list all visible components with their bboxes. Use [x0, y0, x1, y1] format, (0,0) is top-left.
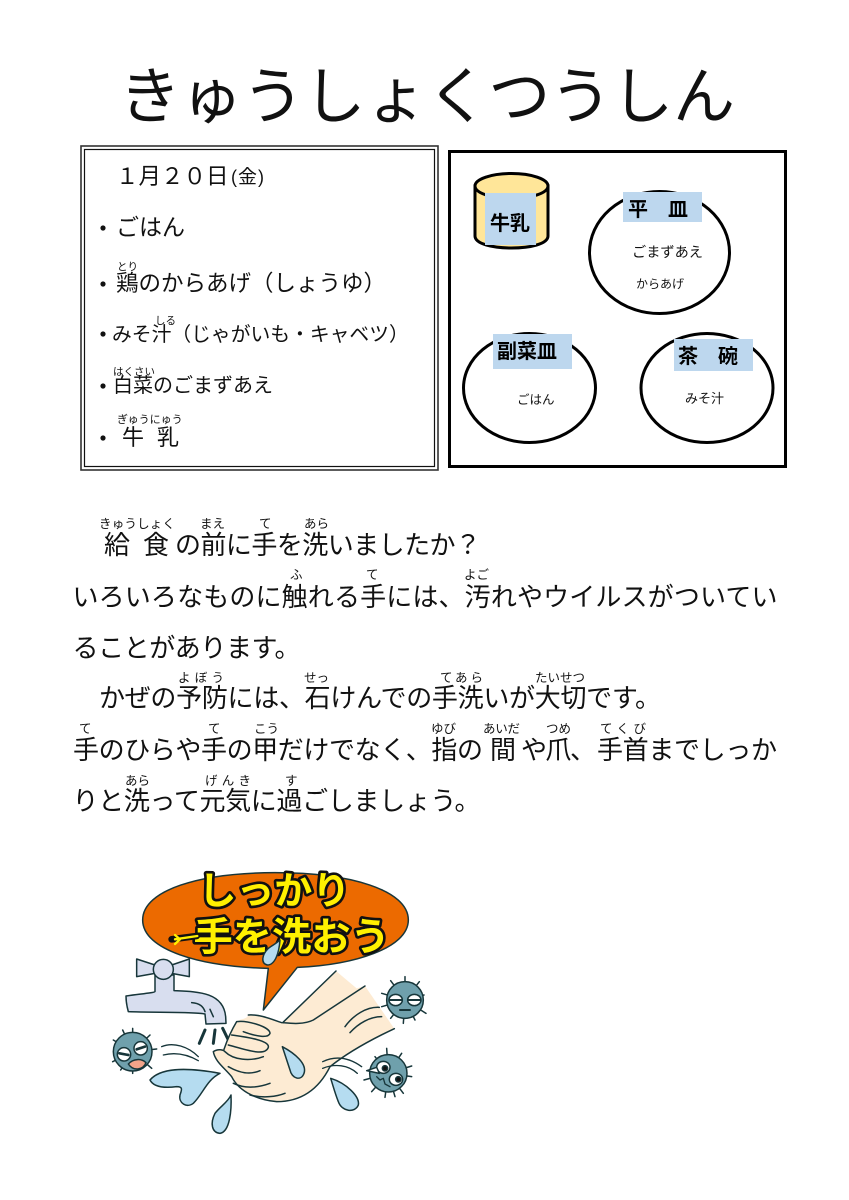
water drops	[150, 1069, 358, 1133]
line 3: ることがあります。	[72, 633, 300, 663]
panel: menu list	[81, 146, 438, 470]
line 5: ゆび	[431, 722, 457, 736]
line 1: の前に手を洗いましたか？	[175, 530, 481, 560]
line 6: す	[285, 774, 298, 788]
menu date: １月２０日	[116, 164, 229, 189]
flat plate: ごまずあえ	[632, 245, 703, 261]
drop on bubble	[263, 940, 280, 965]
menu item: napa salad: はくさい	[113, 366, 155, 378]
line 5: てくび	[600, 722, 646, 736]
menu item: napa salad: 白菜のごまずあえ	[113, 374, 273, 397]
line 1: きゅうしょく	[99, 517, 175, 531]
line 5: 手首までしっか	[597, 735, 777, 765]
line 2: て	[366, 568, 379, 582]
milk carton	[475, 174, 548, 248]
side dish plate: 副菜皿	[497, 340, 557, 363]
line 6: げんき	[205, 774, 251, 788]
line 1: て	[259, 517, 272, 531]
line 2: いろいろなものに触れる手には、汚れやウイルスがついてい	[72, 582, 778, 612]
soup bowl	[641, 334, 773, 442]
line 5	[73, 722, 777, 765]
line 1: 食	[143, 530, 169, 560]
line 1	[99, 517, 481, 560]
bubble slogan: しっかり	[198, 871, 350, 913]
line 2	[72, 567, 778, 612]
menu item: napa salad	[100, 366, 273, 397]
line 1: まえ	[200, 517, 225, 531]
menu date: 金	[238, 166, 257, 188]
menu item: milk: 牛	[122, 425, 144, 450]
title: きゅうしょくつうしん	[119, 63, 735, 132]
line 5: て	[208, 722, 221, 736]
line 6: あら	[125, 774, 150, 788]
menu date: )	[258, 167, 264, 187]
speech bubble	[143, 873, 408, 1010]
germ: left	[113, 1028, 157, 1073]
line 1: あら	[304, 517, 329, 531]
menu item: rice: ごはん	[116, 214, 185, 240]
line 5: 手のひらや手の甲だけでなく、指の	[73, 735, 483, 765]
line 5: て	[79, 722, 92, 736]
menu item: miso soup: みそ汁（じゃがいも・キャベツ）	[112, 324, 409, 346]
side dish plate: ごはん	[517, 392, 555, 407]
flat plate: からあげ	[636, 277, 684, 291]
panel: tray layout	[450, 152, 786, 466]
line 4: てあら	[440, 671, 483, 685]
line 1: 給	[104, 530, 130, 560]
menu item: fried chicken: とり	[117, 261, 138, 273]
menu item: miso soup	[100, 315, 409, 346]
line 5: つめ	[546, 722, 571, 736]
side dish plate	[464, 334, 596, 442]
line 4: たいせつ	[535, 671, 585, 685]
menu item: miso soup: しる	[155, 315, 176, 327]
flat plate	[590, 192, 730, 314]
milk carton: 牛乳	[490, 212, 530, 235]
illustration: wash your hands	[113, 871, 426, 1133]
soup bowl: 碗	[718, 345, 738, 368]
line 4: よぼう	[178, 671, 224, 685]
line 2: ふ	[290, 568, 303, 582]
drop on hand	[282, 1047, 305, 1078]
line 5: 間	[490, 735, 516, 765]
text block: handwashing message	[72, 517, 778, 816]
menu item: fried chicken: 鶏のからあげ（しょうゆ）	[116, 271, 386, 296]
line 6: りと洗って元気に過ごしましょう。	[72, 786, 480, 816]
faucet	[126, 959, 228, 1043]
washing hands	[213, 971, 394, 1102]
flat plate: 平	[628, 199, 648, 221]
line 5: こう	[254, 722, 279, 736]
menu item: milk	[100, 412, 183, 450]
flat plate: 皿	[668, 199, 688, 221]
line 5: あいだ	[483, 722, 520, 736]
menu date: (	[231, 167, 237, 187]
motion lines	[162, 1045, 362, 1073]
germ: upper right	[382, 977, 426, 1023]
soup bowl: 茶	[678, 345, 698, 368]
bubble slogan: 手を洗おう	[193, 916, 390, 960]
soup bowl: みそ汁	[685, 391, 724, 406]
line 4: かぜの予防には、石けんでの手洗いが大切です。	[99, 683, 661, 713]
germ: lower right	[364, 1048, 412, 1097]
bubble slogan	[172, 871, 390, 960]
line 4: せっ	[304, 671, 329, 685]
menu item: fried chicken	[100, 261, 386, 296]
line 2: よご	[464, 567, 490, 582]
line 5: や爪、	[521, 735, 596, 765]
menu item: milk: ぎゅうにゅう	[117, 412, 183, 426]
menu item: milk: 乳	[157, 425, 179, 450]
